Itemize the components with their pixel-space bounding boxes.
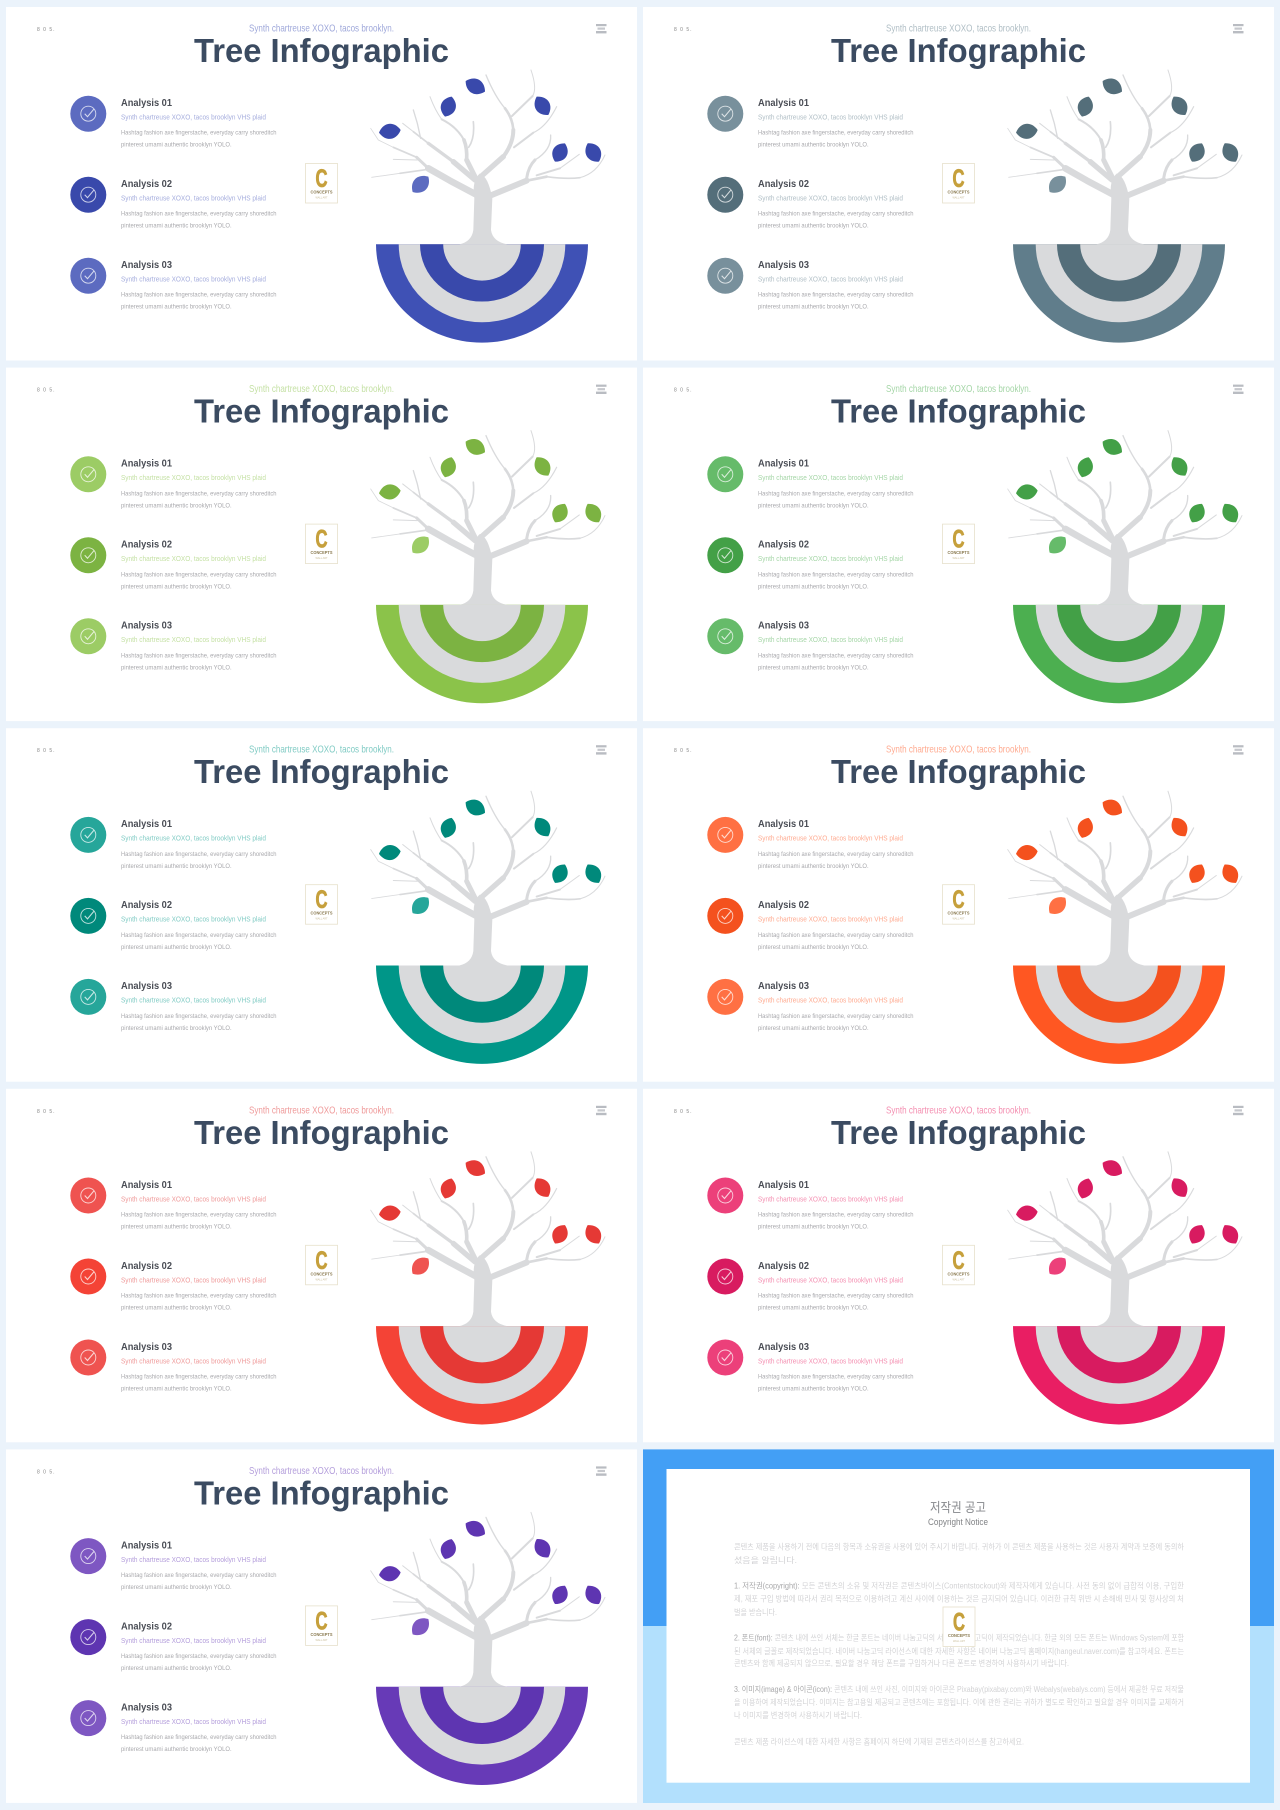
item: Analysis 01: pinterest umami authentic brooklyn YOLO. <box>758 863 869 870</box>
item: Analysis 01: Analysis 01 <box>121 1540 172 1551</box>
item: Analysis 03: Analysis 03 <box>121 1702 172 1713</box>
item: Analysis 03: Synth chartreuse XOXO, tacos brooklyn VHS plaid <box>758 274 903 284</box>
chart: roots rings <box>376 605 588 703</box>
item: Analysis 01: Analysis 01 <box>121 1180 172 1191</box>
item: Analysis 01: Analysis 01 <box>758 459 809 470</box>
item: Analysis 03 <box>707 1340 914 1392</box>
notice section 1: 벌을 받습니다. <box>734 1607 777 1617</box>
item: Analysis 01 <box>70 817 277 870</box>
icon: menu <box>596 1466 606 1476</box>
item: Analysis 02 <box>70 177 277 230</box>
chart: roots rings <box>1013 605 1225 703</box>
item: Analysis 01: Hashtag fashion axe fingerstache, everyday carry shoreditch <box>758 130 914 137</box>
chart: roots rings <box>376 1687 588 1785</box>
item: Analysis 01 <box>70 96 277 149</box>
item: Analysis 01 <box>70 456 277 509</box>
subtitle: Synth chartreuse XOXO, tacos brooklyn. <box>886 383 1031 395</box>
logo badge <box>942 164 974 203</box>
subtitle: Synth chartreuse XOXO, tacos brooklyn. <box>886 1104 1031 1116</box>
item: Analysis 02: Hashtag fashion axe fingerstache, everyday carry shoreditch <box>758 211 914 218</box>
item: Analysis 02 <box>707 177 914 230</box>
panel: blue grey tree infographic <box>643 7 1274 360</box>
subtitle: Synth chartreuse XOXO, tacos brooklyn. <box>249 744 394 756</box>
item: Analysis 03 <box>707 258 914 311</box>
item: Analysis 02: Analysis 02 <box>758 900 809 911</box>
item: Analysis 01: Hashtag fashion axe fingerstache, everyday carry shoreditch <box>121 1572 277 1579</box>
item: Analysis 03: Synth chartreuse XOXO, tacos brooklyn VHS plaid <box>121 1356 266 1365</box>
item: Analysis 03: pinterest umami authentic brooklyn YOLO. <box>121 1746 232 1753</box>
item: Analysis 01: Synth chartreuse XOXO, tacos brooklyn VHS plaid <box>758 473 903 482</box>
item: Analysis 03: Hashtag fashion axe fingerstache, everyday carry shoreditch <box>121 1013 277 1020</box>
item: Analysis 03: Synth chartreuse XOXO, tacos brooklyn VHS plaid <box>758 996 903 1005</box>
item: Analysis 02 <box>70 537 277 590</box>
logo badge <box>306 1606 338 1645</box>
tree with leaves <box>371 431 605 605</box>
item: Analysis 01: Synth chartreuse XOXO, tacos brooklyn VHS plaid <box>121 1194 266 1203</box>
title: Tree Infographic <box>194 754 449 791</box>
logo badge <box>942 524 974 564</box>
notice section 3: 3. 이미지(image) & 아이콘(icon): 콘텐츠 내에 쓰인 사진, 이미지와 아이콘은 Pixabay(pixabay.com)와 Webalys(webalys.com) 등에서 제공한 무료 저작물 <box>734 1684 1184 1694</box>
page number: 8 0 5. <box>37 388 56 394</box>
item: Analysis 01: pinterest umami authentic brooklyn YOLO. <box>758 142 869 149</box>
panel: blue tree infographic <box>6 7 637 360</box>
page number: 8 0 5. <box>37 27 56 33</box>
page number: 8 0 5. <box>37 748 56 754</box>
title: Tree Infographic <box>831 1115 1086 1152</box>
item: Analysis 03 <box>70 1700 277 1753</box>
item: Analysis 03: Hashtag fashion axe fingerstache, everyday carry shoreditch <box>121 1734 277 1741</box>
item: Analysis 01: Synth chartreuse XOXO, tacos brooklyn VHS plaid <box>758 1194 903 1203</box>
tree with leaves <box>1008 791 1242 966</box>
item: Analysis 02 <box>707 898 914 951</box>
item: Analysis 01: pinterest umami authentic brooklyn YOLO. <box>121 502 232 509</box>
item: Analysis 03: Analysis 03 <box>121 1342 172 1353</box>
item: Analysis 02: Synth chartreuse XOXO, tacos brooklyn VHS plaid <box>758 194 903 202</box>
item: Analysis 03: Synth chartreuse XOXO, tacos brooklyn VHS plaid <box>121 274 266 284</box>
subtitle: Synth chartreuse XOXO, tacos brooklyn. <box>886 22 1031 34</box>
item: Analysis 01 <box>707 456 914 509</box>
item: Analysis 01: pinterest umami authentic brooklyn YOLO. <box>758 1224 869 1231</box>
item: Analysis 01 <box>707 817 914 870</box>
icon: menu <box>596 24 606 33</box>
item: Analysis 01 <box>707 96 914 149</box>
notice section 3: 을 이용하여 제작되었습니다. 이미지는 참고용일 제공되고 콘텐츠에는 포함됩니다. 이에 관한 권리는 귀하가 별도로 확인하고 필요할 경우 이미지를 교체하거 <box>734 1697 1184 1707</box>
panel: green tree infographic <box>643 368 1274 721</box>
notice section 3 <box>734 1684 1184 1720</box>
page number: 8 0 5. <box>674 388 693 394</box>
notice section 1: 1. 저작권(copyright): 모든 콘텐츠의 소유 및 저작권은 콘텐츠바이스(Contentstockout)와 제작자에게 있습니다. 사전 동의 없이 급합적 이용, 구입한 <box>734 1580 1185 1590</box>
item: Analysis 01: Hashtag fashion axe fingerstache, everyday carry shoreditch <box>758 490 914 497</box>
item: Analysis 02: pinterest umami authentic brooklyn YOLO. <box>121 583 232 590</box>
item: Analysis 03: pinterest umami authentic brooklyn YOLO. <box>121 1025 232 1032</box>
item: Analysis 01: Hashtag fashion axe fingerstache, everyday carry shoreditch <box>758 851 914 858</box>
icon: menu <box>1233 385 1244 394</box>
item: Analysis 02 <box>707 537 914 590</box>
item: Analysis 03: pinterest umami authentic brooklyn YOLO. <box>121 664 232 671</box>
item: Analysis 02 <box>70 1619 277 1672</box>
item: Analysis 03: Analysis 03 <box>121 621 172 632</box>
title: Tree Infographic <box>831 754 1086 791</box>
item: Analysis 02: Hashtag fashion axe fingerstache, everyday carry shoreditch <box>121 932 277 939</box>
item: Analysis 03 <box>707 979 914 1032</box>
item: Analysis 02: pinterest umami authentic brooklyn YOLO. <box>758 1305 869 1312</box>
notice intro: 콘텐츠 제품을 사용하기 전에 다음의 항목과 소유권을 사용에 있어 주시기 바랍니다. 귀하가 이 콘텐츠 제품을 사용하는 것은 사용자 계약과 보증에 동의하 <box>734 1542 1185 1552</box>
icon: menu <box>596 385 606 394</box>
page number: 8 0 5. <box>37 1469 56 1475</box>
item: Analysis 02: Hashtag fashion axe fingerstache, everyday carry shoreditch <box>121 1653 277 1660</box>
item: Analysis 01: pinterest umami authentic brooklyn YOLO. <box>758 502 869 509</box>
logo badge <box>306 524 338 564</box>
chart: roots rings <box>376 244 588 343</box>
tree with leaves <box>1008 70 1242 244</box>
item: Analysis 02: Analysis 02 <box>121 1621 172 1632</box>
notice section 2: 된 서체의 글꼴로 제작되었습니다. 네이버 나눔고딕 라이선스에 대한 자세한 사항은 네이버 나눔고딕 홈페이지(hangeul.naver.com)를 참고하세요. 폰트는 <box>734 1646 1184 1656</box>
logo badge <box>943 1607 975 1646</box>
item: Analysis 01 <box>70 1178 277 1230</box>
tree with leaves <box>1008 1152 1242 1326</box>
subtitle: Synth chartreuse XOXO, tacos brooklyn. <box>249 383 394 395</box>
item: Analysis 02: pinterest umami authentic brooklyn YOLO. <box>121 1305 232 1312</box>
item: Analysis 02: Synth chartreuse XOXO, tacos brooklyn VHS plaid <box>121 915 266 924</box>
item: Analysis 03: Analysis 03 <box>758 260 809 271</box>
notice subheading: Copyright Notice <box>928 1517 988 1527</box>
item: Analysis 01: Synth chartreuse XOXO, tacos brooklyn VHS plaid <box>758 834 903 843</box>
item: Analysis 01: Analysis 01 <box>758 98 809 109</box>
item: Analysis 03 <box>70 979 277 1032</box>
item: Analysis 03: pinterest umami authentic brooklyn YOLO. <box>121 304 232 311</box>
item: Analysis 01: Synth chartreuse XOXO, tacos brooklyn VHS plaid <box>121 112 266 122</box>
chart: roots rings <box>1013 244 1225 343</box>
item: Analysis 02: Synth chartreuse XOXO, tacos brooklyn VHS plaid <box>121 1636 266 1645</box>
item: Analysis 02: Hashtag fashion axe fingerstache, everyday carry shoreditch <box>121 571 277 578</box>
title: Tree Infographic <box>194 394 449 431</box>
item: Analysis 03: Synth chartreuse XOXO, tacos brooklyn VHS plaid <box>758 1356 903 1365</box>
panel: pink tree infographic <box>643 1089 1274 1442</box>
logo badge <box>942 1245 974 1285</box>
item: Analysis 01: pinterest umami authentic brooklyn YOLO. <box>121 1224 232 1231</box>
logo badge <box>306 1245 338 1285</box>
panel: red tree infographic <box>6 1089 637 1442</box>
item: Analysis 03: Hashtag fashion axe fingerstache, everyday carry shoreditch <box>121 292 277 299</box>
notice section 2: 2. 폰트(font): 콘텐츠 내에 쓰인 서체는 한글 폰트는 네이버 나눔고딕의 서체 및 맑은 고딕이 제작되었습니다. 한글 외의 모든 폰트는 Windows System에 포함 <box>734 1632 1185 1642</box>
item: Analysis 02 <box>70 898 277 951</box>
item: Analysis 02: Synth chartreuse XOXO, tacos brooklyn VHS plaid <box>758 554 903 563</box>
item: Analysis 02: Analysis 02 <box>758 179 809 190</box>
title: Tree Infographic <box>194 33 449 70</box>
item: Analysis 01: pinterest umami authentic brooklyn YOLO. <box>121 142 232 149</box>
panel: teal tree infographic <box>6 728 637 1082</box>
logo badge <box>306 164 338 203</box>
item: Analysis 03: pinterest umami authentic brooklyn YOLO. <box>758 664 869 671</box>
item: Analysis 01: Hashtag fashion axe fingerstache, everyday carry shoreditch <box>121 130 277 137</box>
item: Analysis 02: Analysis 02 <box>121 1261 172 1272</box>
item: Analysis 03: Hashtag fashion axe fingerstache, everyday carry shoreditch <box>121 652 277 659</box>
item: Analysis 01: pinterest umami authentic brooklyn YOLO. <box>121 1584 232 1591</box>
item: Analysis 03: pinterest umami authentic brooklyn YOLO. <box>121 1386 232 1393</box>
logo badge <box>306 885 338 924</box>
item: Analysis 01: Hashtag fashion axe fingerstache, everyday carry shoreditch <box>758 1212 914 1219</box>
item: Analysis 01: Synth chartreuse XOXO, tacos brooklyn VHS plaid <box>121 834 266 843</box>
item: Analysis 02: pinterest umami authentic brooklyn YOLO. <box>121 944 232 951</box>
chart: roots rings <box>376 1326 588 1424</box>
notice intro <box>734 1542 1185 1565</box>
item: Analysis 01 <box>707 1178 914 1230</box>
item: Analysis 03 <box>70 618 277 671</box>
item: Analysis 03 <box>70 1340 277 1392</box>
item: Analysis 03: Synth chartreuse XOXO, tacos brooklyn VHS plaid <box>121 996 266 1005</box>
item: Analysis 01: Synth chartreuse XOXO, tacos brooklyn VHS plaid <box>121 1555 266 1564</box>
item: Analysis 02: Synth chartreuse XOXO, tacos brooklyn VHS plaid <box>121 554 266 563</box>
tree with leaves <box>1008 431 1242 605</box>
item: Analysis 03: pinterest umami authentic brooklyn YOLO. <box>758 304 869 311</box>
item: Analysis 02: Synth chartreuse XOXO, tacos brooklyn VHS plaid <box>121 1275 266 1284</box>
item: Analysis 02: pinterest umami authentic brooklyn YOLO. <box>758 223 869 230</box>
subtitle: Synth chartreuse XOXO, tacos brooklyn. <box>249 1104 394 1116</box>
item: Analysis 03: Hashtag fashion axe fingerstache, everyday carry shoreditch <box>758 652 914 659</box>
item: Analysis 02: pinterest umami authentic brooklyn YOLO. <box>758 583 869 590</box>
item: Analysis 03: Analysis 03 <box>758 1342 809 1353</box>
item: Analysis 03: Hashtag fashion axe fingerstache, everyday carry shoreditch <box>121 1374 277 1381</box>
item: Analysis 03: Analysis 03 <box>758 621 809 632</box>
chart: roots rings <box>1013 966 1225 1064</box>
item: Analysis 02: Analysis 02 <box>758 1261 809 1272</box>
icon: menu <box>1233 745 1244 755</box>
notice section 3: 나 이미지를 변경하여 사용하시기 바랍니다. <box>734 1710 862 1720</box>
tree with leaves <box>371 791 605 966</box>
item: Analysis 01: Hashtag fashion axe fingerstache, everyday carry shoreditch <box>121 851 277 858</box>
item: Analysis 02: Hashtag fashion axe fingerstache, everyday carry shoreditch <box>121 211 277 218</box>
item: Analysis 02: pinterest umami authentic brooklyn YOLO. <box>121 1665 232 1672</box>
item: Analysis 01: Analysis 01 <box>121 459 172 470</box>
logo badge <box>942 885 974 924</box>
page number: 8 0 5. <box>674 1109 693 1115</box>
item: Analysis 01: Synth chartreuse XOXO, tacos brooklyn VHS plaid <box>121 473 266 482</box>
item: Analysis 02: pinterest umami authentic brooklyn YOLO. <box>758 944 869 951</box>
item: Analysis 02 <box>707 1258 914 1312</box>
item: Analysis 02: Analysis 02 <box>758 540 809 551</box>
icon: menu <box>596 1106 606 1115</box>
item: Analysis 01 <box>70 1538 277 1591</box>
subtitle: Synth chartreuse XOXO, tacos brooklyn. <box>249 22 394 34</box>
item: Analysis 03: pinterest umami authentic brooklyn YOLO. <box>758 1386 869 1393</box>
item: Analysis 02: pinterest umami authentic brooklyn YOLO. <box>121 223 232 230</box>
page number: 8 0 5. <box>674 27 693 33</box>
item: Analysis 01: Analysis 01 <box>758 819 809 830</box>
item: Analysis 03: Hashtag fashion axe fingerstache, everyday carry shoreditch <box>758 1374 914 1381</box>
item: Analysis 03 <box>707 618 914 671</box>
item: Analysis 03: pinterest umami authentic brooklyn YOLO. <box>758 1025 869 1032</box>
panel: copyright notice <box>643 1449 1274 1803</box>
panel: deep orange tree infographic <box>643 728 1274 1082</box>
notice footer: 콘텐츠 제품 라이선스에 대한 자세한 사항은 홈페이지 하단에 기재된 콘텐츠라이선스를 참고하세요. <box>734 1736 1024 1746</box>
icon: menu <box>1233 24 1244 33</box>
notice section 1: 제, 재포 구입 방법에 따라서 권리 목적으로 이용하려고 계신 사이에 이용하는 것은 금지되어 있습니다. 이러한 규칙 위반 시 손해배 민사 및 형사상의 처 <box>734 1594 1184 1604</box>
item: Analysis 02: Hashtag fashion axe fingerstache, everyday carry shoreditch <box>758 932 914 939</box>
notice section 2: 콘텐츠와 함께 제공되지 않으므로, 필요할 경우 해당 폰트를 구입하거나 다른 폰트로 변경하여 사용하시기 바랍니다. <box>734 1658 1069 1668</box>
item: Analysis 03: Hashtag fashion axe fingerstache, everyday carry shoreditch <box>758 1013 914 1020</box>
panel: purple tree infographic <box>6 1449 637 1803</box>
chart: roots rings <box>376 966 588 1064</box>
item: Analysis 02: Synth chartreuse XOXO, tacos brooklyn VHS plaid <box>758 1275 903 1284</box>
item: Analysis 02: Synth chartreuse XOXO, tacos brooklyn VHS plaid <box>121 194 266 202</box>
notice section 1 <box>734 1580 1185 1617</box>
page number: 8 0 5. <box>37 1109 56 1115</box>
item: Analysis 01: Hashtag fashion axe fingerstache, everyday carry shoreditch <box>121 490 277 497</box>
title: Tree Infographic <box>831 394 1086 431</box>
subtitle: Synth chartreuse XOXO, tacos brooklyn. <box>249 1465 394 1477</box>
item: Analysis 02: Analysis 02 <box>121 540 172 551</box>
item: Analysis 03: Analysis 03 <box>121 260 172 271</box>
item: Analysis 02: Analysis 02 <box>121 900 172 911</box>
item: Analysis 02: Hashtag fashion axe fingerstache, everyday carry shoreditch <box>121 1293 277 1300</box>
tree with leaves <box>371 1152 605 1326</box>
item: Analysis 01: Analysis 01 <box>121 98 172 109</box>
item: Analysis 02: Analysis 02 <box>121 179 172 190</box>
page number: 8 0 5. <box>674 748 693 754</box>
item: Analysis 03: Analysis 03 <box>758 981 809 992</box>
title: Tree Infographic <box>194 1475 449 1512</box>
item: Analysis 03: Synth chartreuse XOXO, tacos brooklyn VHS plaid <box>121 1717 266 1726</box>
panel: light green tree infographic <box>6 368 637 721</box>
notice section 2 <box>734 1632 1185 1668</box>
subtitle: Synth chartreuse XOXO, tacos brooklyn. <box>886 744 1031 756</box>
tree with leaves <box>371 70 605 244</box>
item: Analysis 03 <box>70 258 277 311</box>
item: Analysis 02: Hashtag fashion axe fingerstache, everyday carry shoreditch <box>758 1293 914 1300</box>
item: Analysis 02: Synth chartreuse XOXO, tacos brooklyn VHS plaid <box>758 915 903 924</box>
item: Analysis 03: Hashtag fashion axe fingerstache, everyday carry shoreditch <box>758 292 914 299</box>
item: Analysis 03: Synth chartreuse XOXO, tacos brooklyn VHS plaid <box>758 635 903 644</box>
chart: roots rings <box>1013 1326 1225 1424</box>
title: Tree Infographic <box>831 33 1086 70</box>
notice intro: 셨음을 알립니다. <box>734 1555 797 1565</box>
icon: menu <box>596 745 606 755</box>
item: Analysis 01: pinterest umami authentic brooklyn YOLO. <box>121 863 232 870</box>
item: Analysis 01: Analysis 01 <box>121 819 172 830</box>
item: Analysis 03: Analysis 03 <box>121 981 172 992</box>
title: Tree Infographic <box>194 1115 449 1152</box>
item: Analysis 01: Hashtag fashion axe fingerstache, everyday carry shoreditch <box>121 1212 277 1219</box>
item: Analysis 02: Hashtag fashion axe fingerstache, everyday carry shoreditch <box>758 571 914 578</box>
item: Analysis 01: Analysis 01 <box>758 1180 809 1191</box>
tree with leaves <box>371 1512 605 1687</box>
item: Analysis 01: Synth chartreuse XOXO, tacos brooklyn VHS plaid <box>758 112 903 122</box>
icon: menu <box>1233 1106 1244 1115</box>
notice heading: 저작권 공고 <box>930 1500 986 1515</box>
item: Analysis 02 <box>70 1258 277 1312</box>
item: Analysis 03: Synth chartreuse XOXO, tacos brooklyn VHS plaid <box>121 635 266 644</box>
